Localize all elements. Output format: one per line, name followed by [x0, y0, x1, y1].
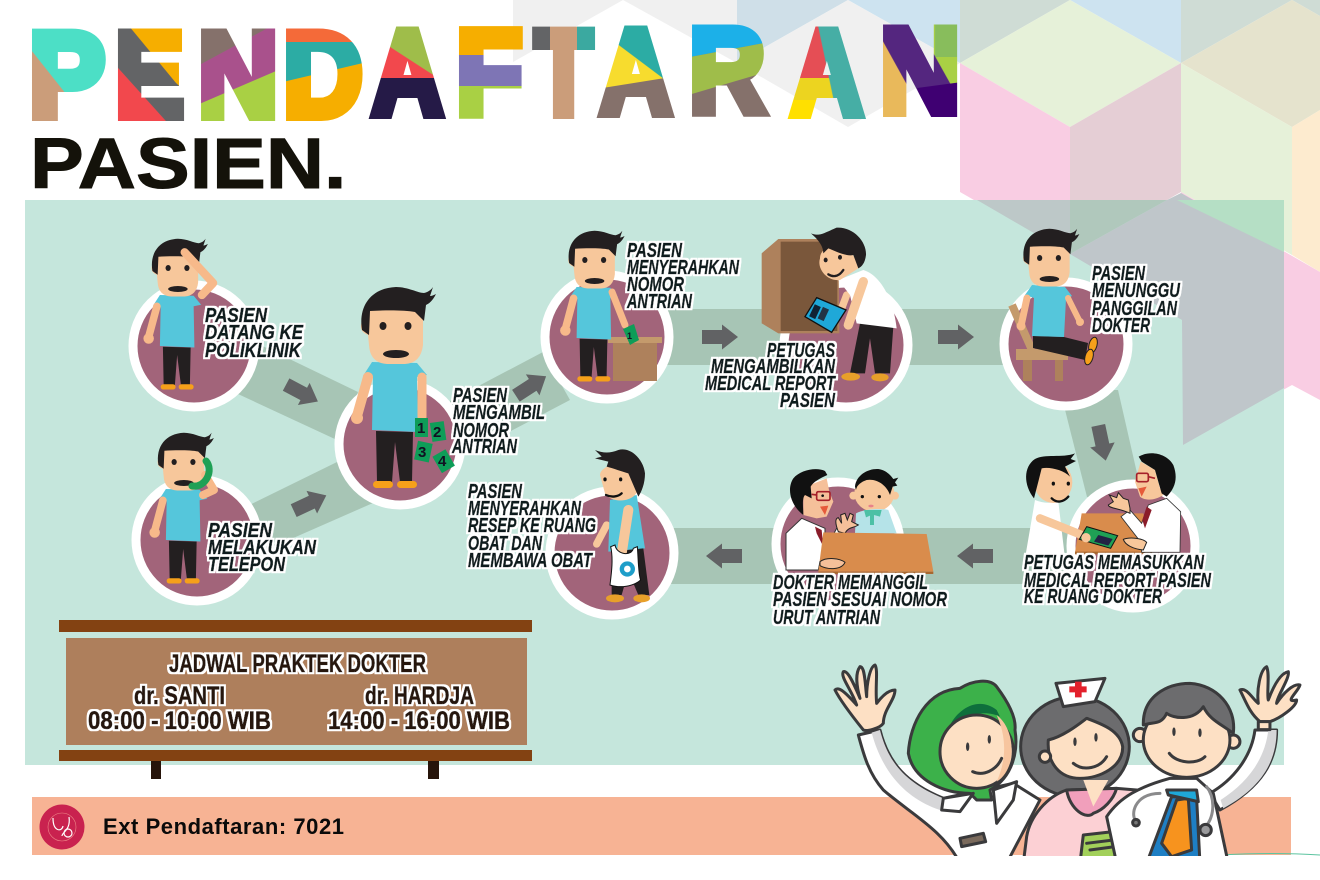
label: officer gets report	[705, 340, 836, 412]
figure: officer hands report to doctor	[1025, 453, 1181, 558]
title: PENDAFTARAN: N	[198, 9, 278, 142]
label: phone: PASIEN	[208, 520, 272, 542]
queue tickets: 1	[417, 420, 425, 437]
label: officer gets report: MEDICAL REPORT	[705, 373, 836, 395]
overlay: cubes over panel	[977, 193, 1284, 445]
queue tickets: 4	[438, 453, 447, 470]
label: pharmacy: RESEP KE RUANG	[468, 515, 596, 537]
figure: patient phoning	[149, 433, 214, 584]
queue tickets	[414, 418, 455, 473]
label: waits: DOKTER	[1092, 315, 1150, 337]
label: waits: PASIEN	[1092, 263, 1145, 285]
step labels	[205, 240, 1211, 629]
subtitle: PASIEN.: PASIEN.	[30, 124, 346, 204]
title: PENDAFTARAN: F	[456, 7, 522, 140]
footer logo	[40, 804, 84, 850]
label: officer delivers report: KE RUANG DOKTER	[1024, 586, 1162, 608]
title: PENDAFTARAN: A	[600, 5, 672, 139]
label: hand in number: PASIEN	[627, 240, 682, 262]
arrows	[280, 324, 1118, 568]
label: officer gets report: MENGAMBILKAN	[711, 356, 835, 378]
label: waits: PANGGILAN	[1092, 298, 1177, 320]
figure: doctor and patient at desk	[786, 469, 933, 574]
label: arrive: PASIEN	[205, 305, 267, 327]
schedule text: dr. SANTI	[134, 682, 225, 710]
schedule text	[88, 650, 510, 735]
schedule text: JADWAL PRAKTEK DOKTER	[169, 650, 426, 678]
title: PENDAFTARAN: R	[689, 3, 765, 138]
label: arrive: DATANG KE	[205, 322, 304, 344]
label: phone: TELEPON	[208, 554, 285, 576]
label: doctor calls: PASIEN SESUAI NOMOR	[773, 589, 947, 611]
background: isometric cubes	[513, 0, 1320, 400]
male doctor	[1107, 667, 1300, 863]
label: hand in number: NOMOR	[627, 274, 684, 296]
title: PENDAFTARAN: A	[791, 6, 863, 140]
schedule signboard	[59, 620, 532, 779]
label: hand in number: MENYERAHKAN	[627, 257, 739, 279]
label: phone	[208, 520, 316, 576]
label: pharmacy: MENYERAHKAN	[468, 498, 581, 520]
label: hand in number: ANTRIAN	[626, 291, 692, 313]
queue tickets: 3	[418, 444, 426, 461]
label: arrive	[205, 305, 304, 362]
label: officer delivers report: PETUGAS MEMASUKKAN	[1024, 552, 1204, 574]
title: PENDAFTARAN: N	[880, 5, 960, 138]
schedule text: 14:00 - 16:00 WIB	[328, 707, 510, 735]
title: PENDAFTARAN: E	[115, 7, 184, 142]
label: waits	[1092, 263, 1180, 337]
label: phone: MELAKUKAN	[208, 537, 316, 559]
label: officer delivers report	[1024, 552, 1211, 608]
footer bar	[32, 797, 1291, 855]
figure: patient arriving, hand on head	[143, 239, 213, 390]
figure: officer at cabinet	[762, 228, 897, 381]
label: doctor calls: URUT ANTRIAN	[773, 607, 880, 629]
title: PENDAFTARAN: A	[372, 7, 443, 140]
panel: process flow background	[25, 200, 1284, 765]
label: doctor calls: DOKTER MEMANGGIL	[773, 572, 928, 594]
label: pharmacy: OBAT DAN	[468, 533, 542, 555]
label: pharmacy: PASIEN	[468, 481, 522, 503]
schedule text: dr. HARDJA	[365, 682, 474, 710]
illustration: waving medical staff	[835, 665, 1320, 863]
label: waits: MENUNGGU	[1092, 280, 1180, 302]
figure: patient taking queue number	[351, 287, 455, 488]
woman doctor	[835, 665, 1040, 863]
figure: patient handing in queue number: 1	[627, 331, 632, 341]
label: take number: PASIEN	[453, 385, 507, 407]
label: take number: NOMOR	[453, 420, 509, 442]
footer text: Ext Pendaftaran: 7021	[103, 814, 344, 839]
nurse	[1021, 678, 1137, 863]
title: PENDAFTARAN: T	[535, 6, 592, 140]
title: PENDAFTARAN: D	[283, 9, 363, 142]
queue tickets: 2	[433, 424, 441, 441]
figure: patient seated	[1012, 229, 1099, 381]
title: PENDAFTARAN	[29, 3, 960, 142]
label: officer gets report: PETUGAS	[767, 340, 835, 362]
label: pharmacy	[468, 481, 596, 572]
step circles	[133, 275, 1195, 615]
label: take number	[451, 385, 545, 458]
label: officer gets report: PASIEN	[780, 390, 835, 412]
label: officer delivers report: MEDICAL REPORT PASIEN	[1024, 570, 1211, 592]
label: hand in number	[626, 240, 739, 313]
flow bands	[225, 309, 1142, 584]
figure: patient handing in queue number	[560, 231, 662, 382]
label: take number: MENGAMBIL	[453, 402, 545, 424]
figure: patient with medicine bag	[595, 449, 650, 602]
label: doctor calls	[773, 572, 947, 629]
label: pharmacy: MEMBAWA OBAT	[468, 550, 593, 572]
schedule text: 08:00 - 10:00 WIB	[88, 707, 271, 735]
label: take number: ANTRIAN	[451, 436, 517, 458]
title: PENDAFTARAN: P	[29, 7, 105, 142]
label: arrive: POLIKLINIK	[205, 340, 302, 362]
